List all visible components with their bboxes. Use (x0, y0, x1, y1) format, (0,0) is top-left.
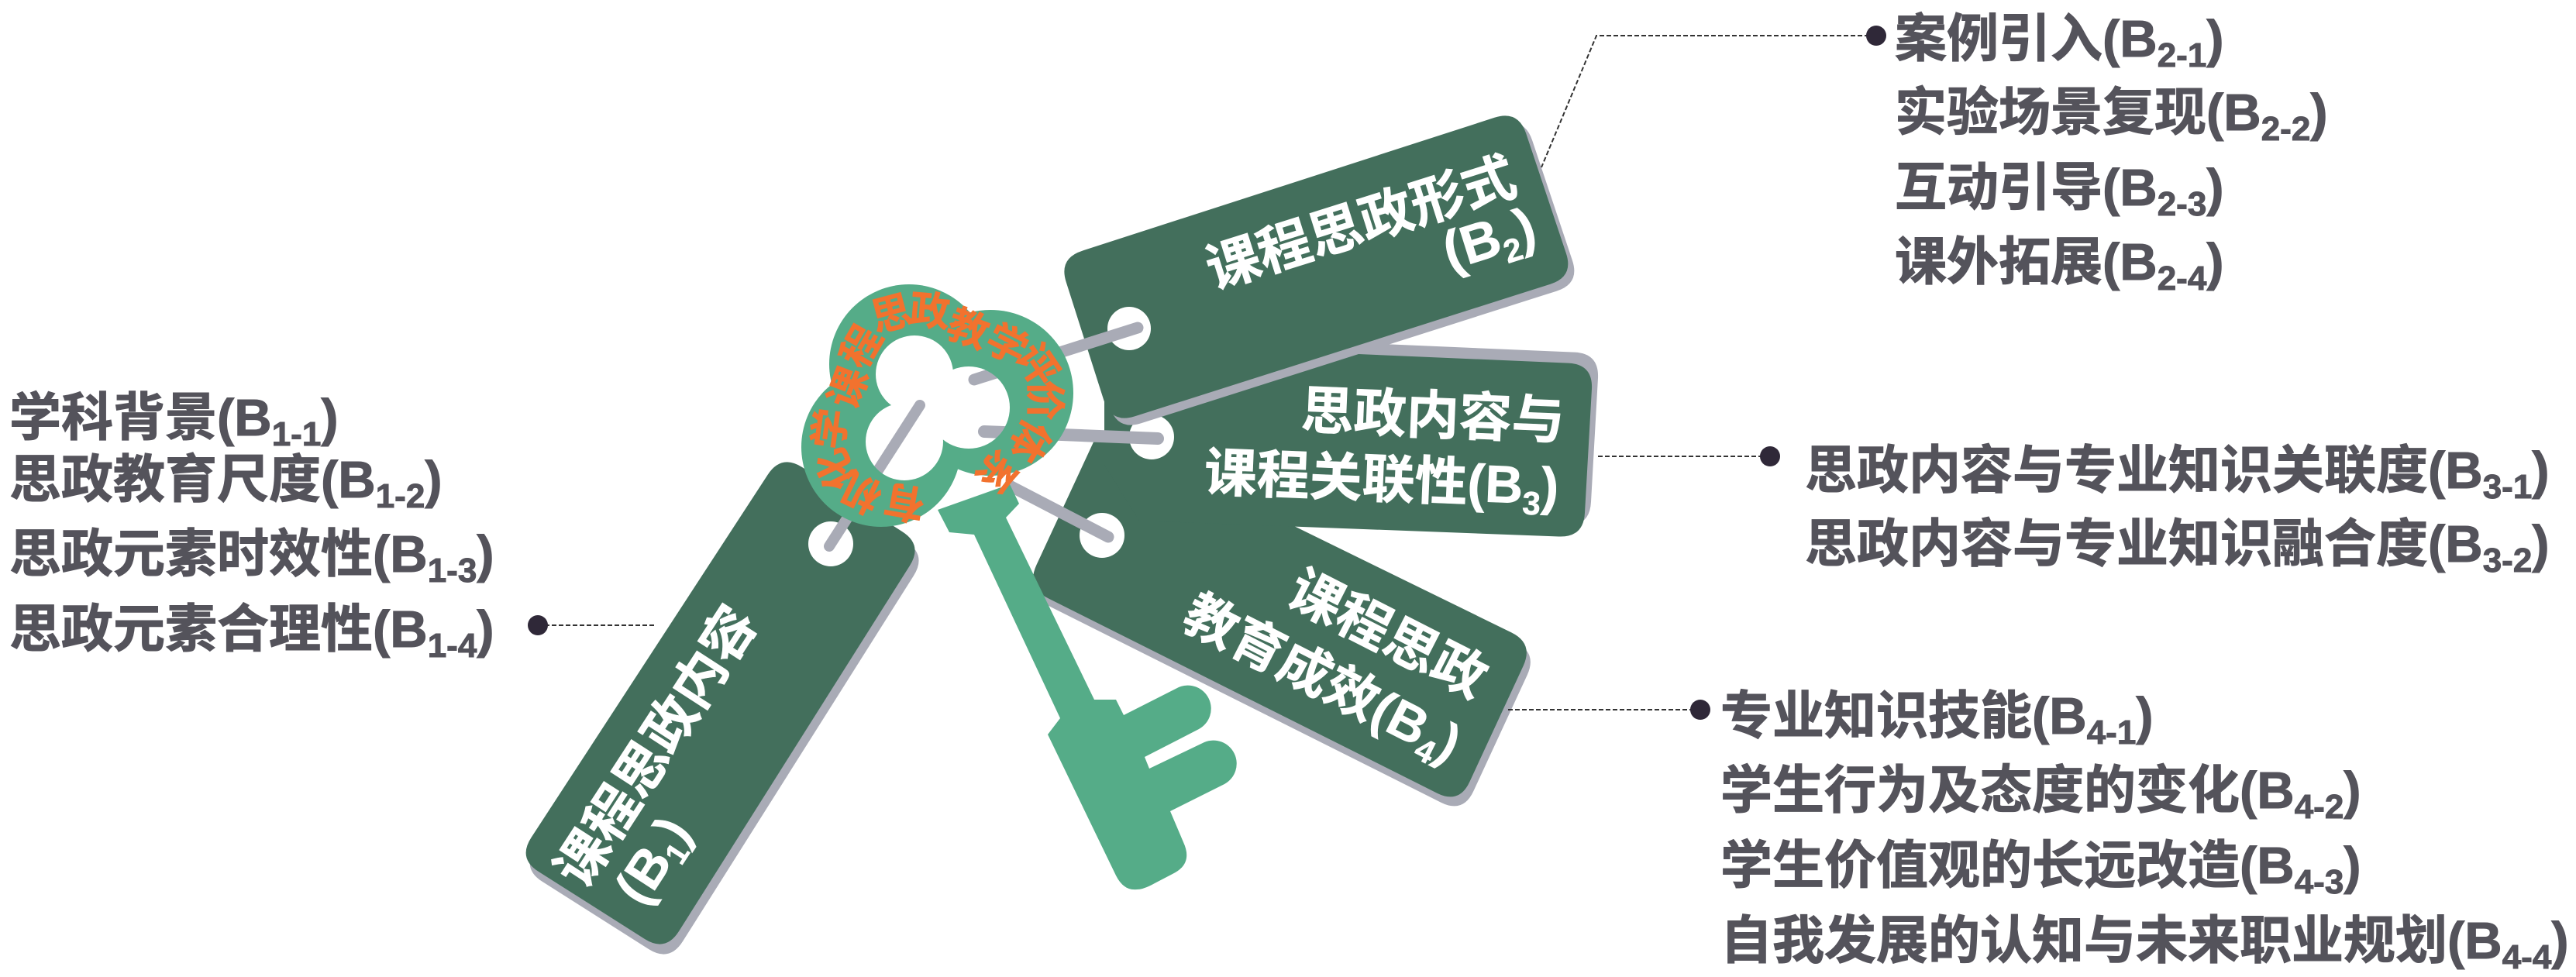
callout: B2 items: 2-4 (2158, 260, 2207, 298)
callout: B2 items: 案例引入(B (1895, 10, 2158, 68)
callout: B2 items: 2-1 (2158, 36, 2206, 74)
tag: B1 course content: 课程思政内容 (544, 596, 769, 897)
callout: B3 items: ) (2532, 515, 2550, 573)
tag: B1 course content: 1 (659, 838, 697, 870)
tag: B4 course outcomes: 课程思政 (1279, 559, 1496, 710)
tag: B3 content relevance: 3 (1522, 485, 1541, 521)
tag: B3 content relevance (1104, 332, 1598, 537)
callout: B4 items: 学生行为及态度的变化(B (1720, 762, 2295, 820)
tag: B2 course form: 课程思政形式 (1199, 146, 1523, 300)
tag: B2 course form (1064, 115, 1574, 425)
tag: B3 content relevance: ) (1540, 457, 1560, 516)
tag: B1 course content (526, 462, 919, 955)
callout: B1 items (9, 389, 494, 665)
callout: B3 items: ) (2532, 442, 2550, 500)
callout: B2 items: 2-2 (2261, 110, 2310, 148)
callout: B2 items: ) (2206, 233, 2224, 291)
tag: B2 course form: ) (1507, 196, 1542, 259)
tag: B4 course outcomes: ) (1427, 713, 1470, 773)
callout: B1 items: ) (425, 451, 443, 509)
callout: B1 items: 思政元素合理性(B (9, 600, 428, 659)
callout: B4 items: ) (2344, 762, 2361, 820)
callout: B1 items: 思政教育尺度(B (9, 451, 376, 509)
callout: B2 items: 2-3 (2158, 185, 2206, 223)
callout: B4 items (1720, 687, 2569, 976)
tag: B3 content relevance: 课程关联性(B (1203, 443, 1524, 515)
callout: B2 items: ) (2310, 84, 2328, 142)
callout: B2 items: 课外拓展(B (1895, 233, 2158, 291)
callout: B1 items: 1-2 (376, 477, 425, 515)
callout: B3 items (1805, 442, 2550, 580)
callout: B3 items: 思政内容与专业知识关联度(B (1805, 442, 2483, 500)
callout: B1 items: ) (477, 525, 494, 583)
key rings: connecting rods (829, 328, 1158, 546)
callout: B4 items: 自我发展的认知与未来职业规划(B (1720, 912, 2502, 970)
callout: B1 items: 1-4 (428, 627, 477, 665)
callout: B4 items: ) (2136, 687, 2154, 745)
callout: B3 items: 3-1 (2483, 468, 2532, 506)
callout: B4 items: 4-3 (2295, 863, 2344, 901)
callout: B1 items: 1-1 (272, 415, 321, 453)
tag: B4 course outcomes: 4 (1409, 731, 1442, 771)
tag: B2 course form: 2 (1499, 230, 1527, 270)
callout: B4 items: ) (2344, 837, 2361, 895)
connector: B2 leader line (1541, 26, 1886, 167)
connector: B4 leader line (1508, 700, 1710, 720)
callout: B4 items: 4-4 (2502, 938, 2552, 976)
tag: B1 course content: (B (604, 836, 684, 914)
callout: B1 items: ) (477, 600, 494, 659)
callout: B3 items: 思政内容与专业知识融合度(B (1805, 515, 2483, 573)
callout: B4 items: ) (2551, 912, 2569, 970)
connector: B1 leader line (528, 615, 656, 635)
callout: B1 items: 学科背景(B (9, 389, 272, 447)
tag: B4 course outcomes: 教育成效(B (1174, 584, 1438, 757)
icon: key with clover head (801, 284, 1237, 889)
callout: B1 items: ) (321, 389, 339, 447)
callout: B2 items: 实验场景复现(B (1895, 84, 2261, 142)
callout: B2 items: ) (2206, 10, 2224, 68)
callout: B4 items: 专业知识技能(B (1720, 687, 2087, 745)
tag: B3 content relevance: 思政内容与 (1300, 381, 1565, 451)
callout: B3 items: 3-2 (2483, 542, 2532, 580)
callout: B2 items (1895, 10, 2328, 298)
callout: B4 items: 4-1 (2087, 714, 2136, 752)
callout: B4 items: 学生价值观的长远改造(B (1720, 837, 2295, 895)
tag: B2 course form: (B (1435, 207, 1508, 281)
connector: B3 leader line (1598, 446, 1780, 466)
callout: B1 items: 1-3 (428, 552, 477, 590)
callout: B2 items: ) (2206, 159, 2224, 217)
callout: B1 items: 思政元素时效性(B (9, 525, 428, 583)
callout: B2 items: 互动引导(B (1895, 159, 2158, 217)
tag: B4 course outcomes (1033, 431, 1531, 806)
tag: B1 course content: ) (643, 807, 702, 853)
callout: B4 items: 4-2 (2295, 788, 2344, 826)
key ring title text: 有机化学课程思政教学评价体系 (806, 287, 1066, 527)
